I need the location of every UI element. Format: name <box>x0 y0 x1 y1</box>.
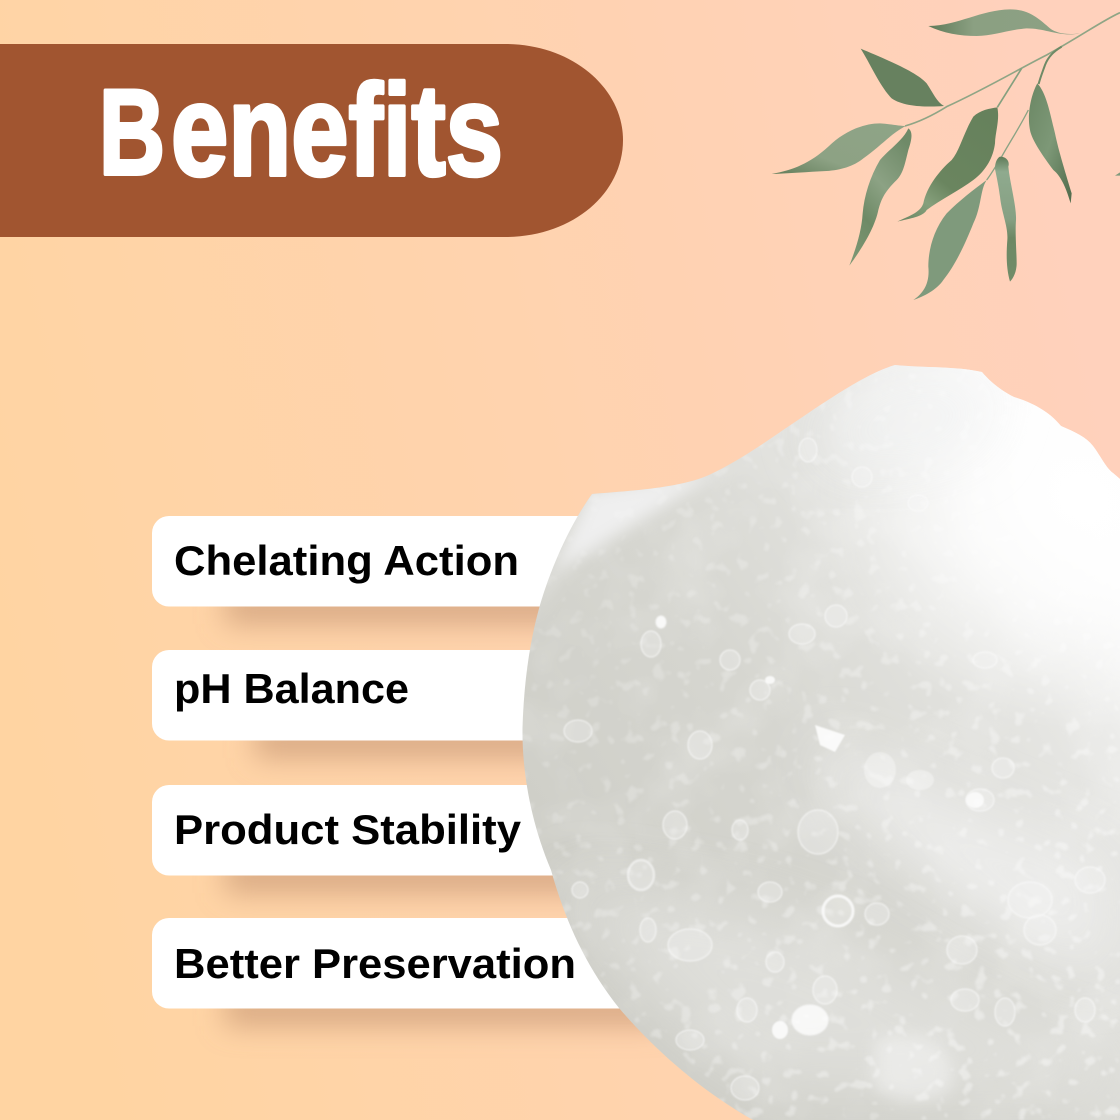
title banner <box>0 44 623 237</box>
card: pH Balance <box>152 650 632 740</box>
benefit list <box>152 516 652 1008</box>
salt crystals photo <box>522 365 1120 1120</box>
card: Better Preservation <box>152 918 652 1008</box>
benefit card shadows <box>225 590 665 1026</box>
card: pH Balance: pH Balance <box>174 665 409 712</box>
card: Chelating Action: Chelating Action <box>174 537 519 584</box>
icon: eucalyptus branch <box>772 9 1120 300</box>
card: Chelating Action <box>152 516 632 606</box>
card: Product Stability <box>152 785 632 876</box>
heading: Benefits <box>99 57 503 203</box>
card: Better Preservation: Better Preservation <box>174 940 576 987</box>
heading: Benefits: B <box>99 64 165 200</box>
heading: Benefits: enefits <box>171 57 503 203</box>
card: Product Stability: Product Stability <box>174 806 522 853</box>
